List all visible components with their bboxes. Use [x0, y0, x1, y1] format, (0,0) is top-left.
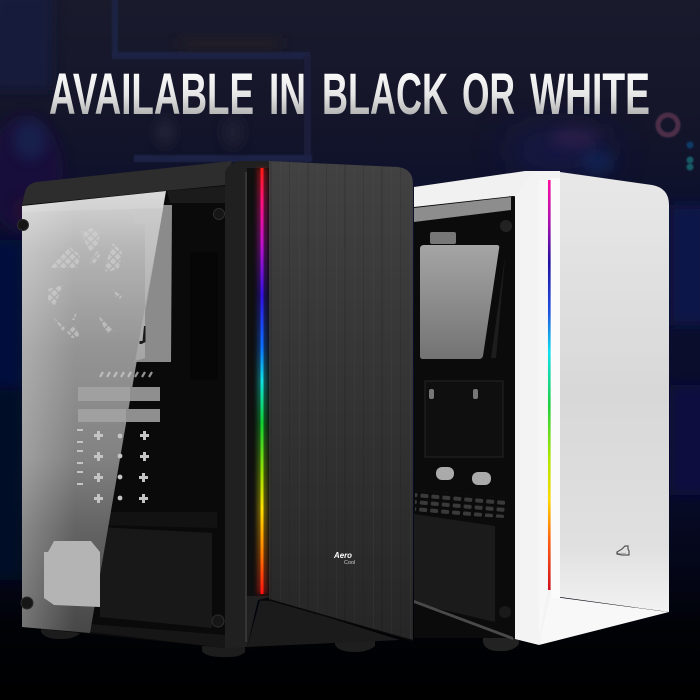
glass side panel reflection	[22, 191, 166, 633]
white case front frame	[515, 171, 560, 645]
black case feet	[41, 627, 375, 657]
thumb screws	[18, 208, 224, 627]
black computer case	[18, 161, 413, 657]
black notch behind glass	[140, 326, 146, 344]
white computer case	[414, 171, 669, 651]
white case feet	[483, 636, 519, 651]
title: AVAILABLE	[49, 62, 254, 127]
title: BLACK	[322, 62, 448, 127]
screw holes grid	[77, 429, 149, 503]
white case bottom wedge	[539, 596, 669, 645]
black case front panel	[260, 161, 413, 641]
vent slits	[100, 372, 152, 377]
AeroCool logo: Aero	[333, 551, 352, 560]
white case logo	[617, 546, 629, 555]
expansion slot covers	[78, 387, 160, 422]
title: OR	[462, 62, 515, 127]
AeroCool logo	[333, 551, 355, 566]
AeroCool logo: Cool	[344, 560, 355, 566]
RGB light strip glow	[257, 168, 267, 594]
black case bottom wedge	[247, 599, 400, 647]
light strip on glass edge	[132, 209, 163, 362]
fan mesh	[48, 228, 122, 338]
black case front frame	[225, 161, 270, 648]
white case front panel	[560, 172, 669, 612]
title: IN	[269, 62, 306, 127]
white case interior	[414, 196, 515, 640]
black case top panel	[22, 161, 232, 205]
RGB light strip	[260, 168, 264, 594]
white case top panel	[414, 171, 545, 207]
black case rear plate	[132, 205, 172, 362]
black case interior	[22, 184, 225, 648]
title	[49, 62, 650, 127]
white case logo: AeroCool	[617, 552, 626, 555]
white case RGB light strip	[548, 180, 551, 590]
PSU cutout plate	[44, 541, 100, 607]
